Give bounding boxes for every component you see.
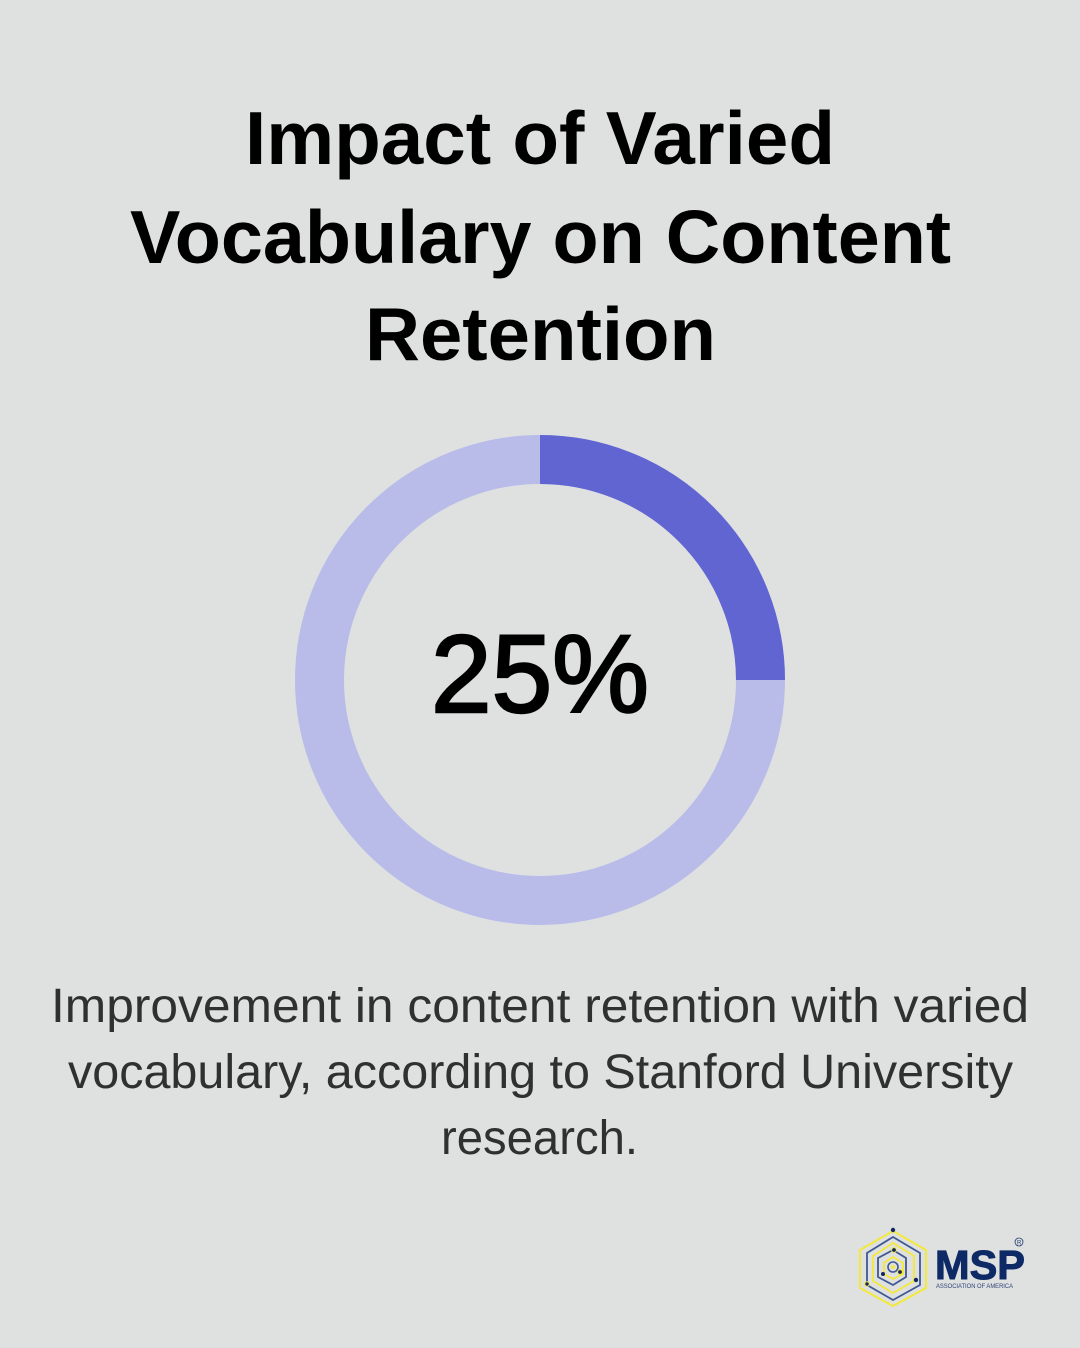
description text: Improvement in content retention with varied xyxy=(51,980,1029,1033)
registered mark xyxy=(1015,1238,1023,1246)
tagline: ASSOCIATION OF AMERICA xyxy=(936,1284,1013,1290)
registered mark: R xyxy=(1017,1240,1022,1246)
title: Retention xyxy=(365,292,716,376)
title: Vocabulary on Content xyxy=(130,195,951,279)
title xyxy=(130,96,951,376)
title: Impact of Varied xyxy=(245,96,835,180)
logo: MSP Association of America xyxy=(860,1228,1025,1306)
description text xyxy=(51,980,1029,1165)
donut chart: 25% xyxy=(320,460,760,900)
description text: research. xyxy=(441,1112,638,1165)
icon: hexagon circuit mark xyxy=(860,1228,926,1306)
description text: vocabulary, according to Stanford University xyxy=(68,1046,1013,1099)
wordmark: MSP xyxy=(935,1242,1025,1288)
donut value: 25% xyxy=(431,613,649,736)
